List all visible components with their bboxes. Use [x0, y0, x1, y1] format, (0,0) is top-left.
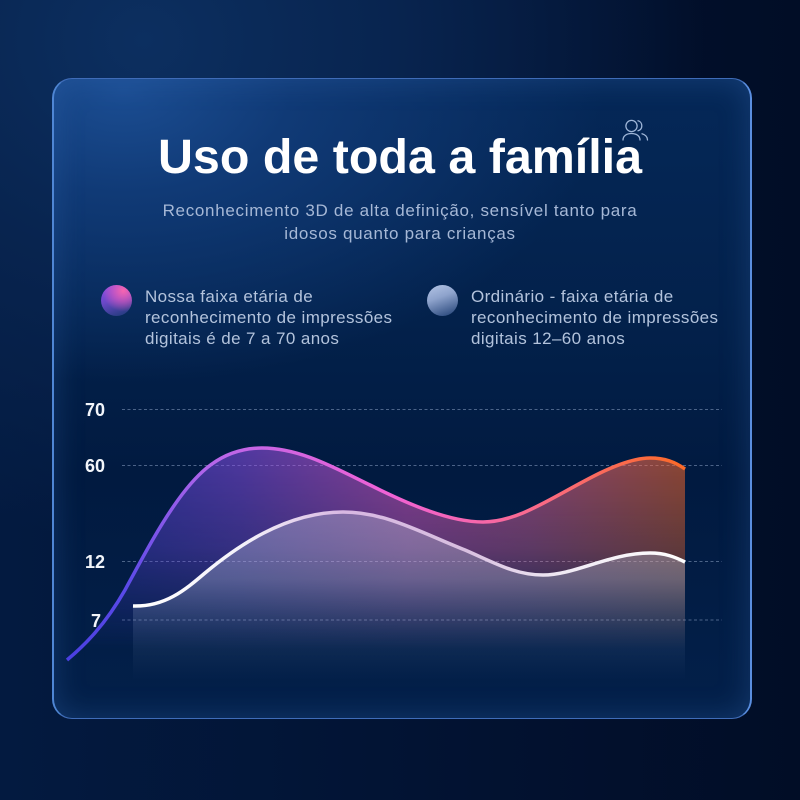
legend text: ordinary range	[471, 287, 718, 348]
axis label 60: 60	[85, 456, 105, 476]
area: our range	[97, 450, 685, 639]
legend dot: gradient purple	[101, 285, 132, 316]
line: our range	[67, 448, 685, 660]
title: Uso de toda a família	[158, 130, 642, 184]
subtitle: Reconhecimento 3D de alta definição, sensível tanto para	[163, 201, 637, 220]
area chart	[66, 409, 722, 662]
legend: our age range	[101, 285, 392, 348]
legend text: our range	[145, 287, 392, 348]
legend text: ordinary range: digitais 12–60 anos	[471, 329, 625, 348]
legend: ordinary age range	[427, 285, 718, 348]
subtitle	[163, 201, 637, 243]
legend text: our range: digitais é de 7 a 70 anos	[145, 329, 339, 348]
legend text: ordinary range: reconhecimento de impressões	[471, 308, 718, 327]
axis label 12: 12	[85, 552, 105, 572]
icon: family people	[622, 120, 648, 141]
axis label 7: 7	[91, 611, 101, 631]
axis label 70: 70	[85, 400, 105, 420]
line: ordinary range	[133, 512, 685, 606]
legend text: ordinary range: Ordinário - faixa etária de	[471, 287, 674, 306]
legend text: our range: Nossa faixa etária de	[145, 287, 313, 306]
legend dot: gradient white-blue	[427, 285, 458, 316]
subtitle: idosos quanto para crianças	[284, 224, 516, 243]
panel: glass card	[52, 78, 752, 719]
area: ordinary range	[133, 512, 685, 680]
legend text: our range: reconhecimento de impressões	[145, 308, 392, 327]
grid lines	[122, 410, 722, 620]
